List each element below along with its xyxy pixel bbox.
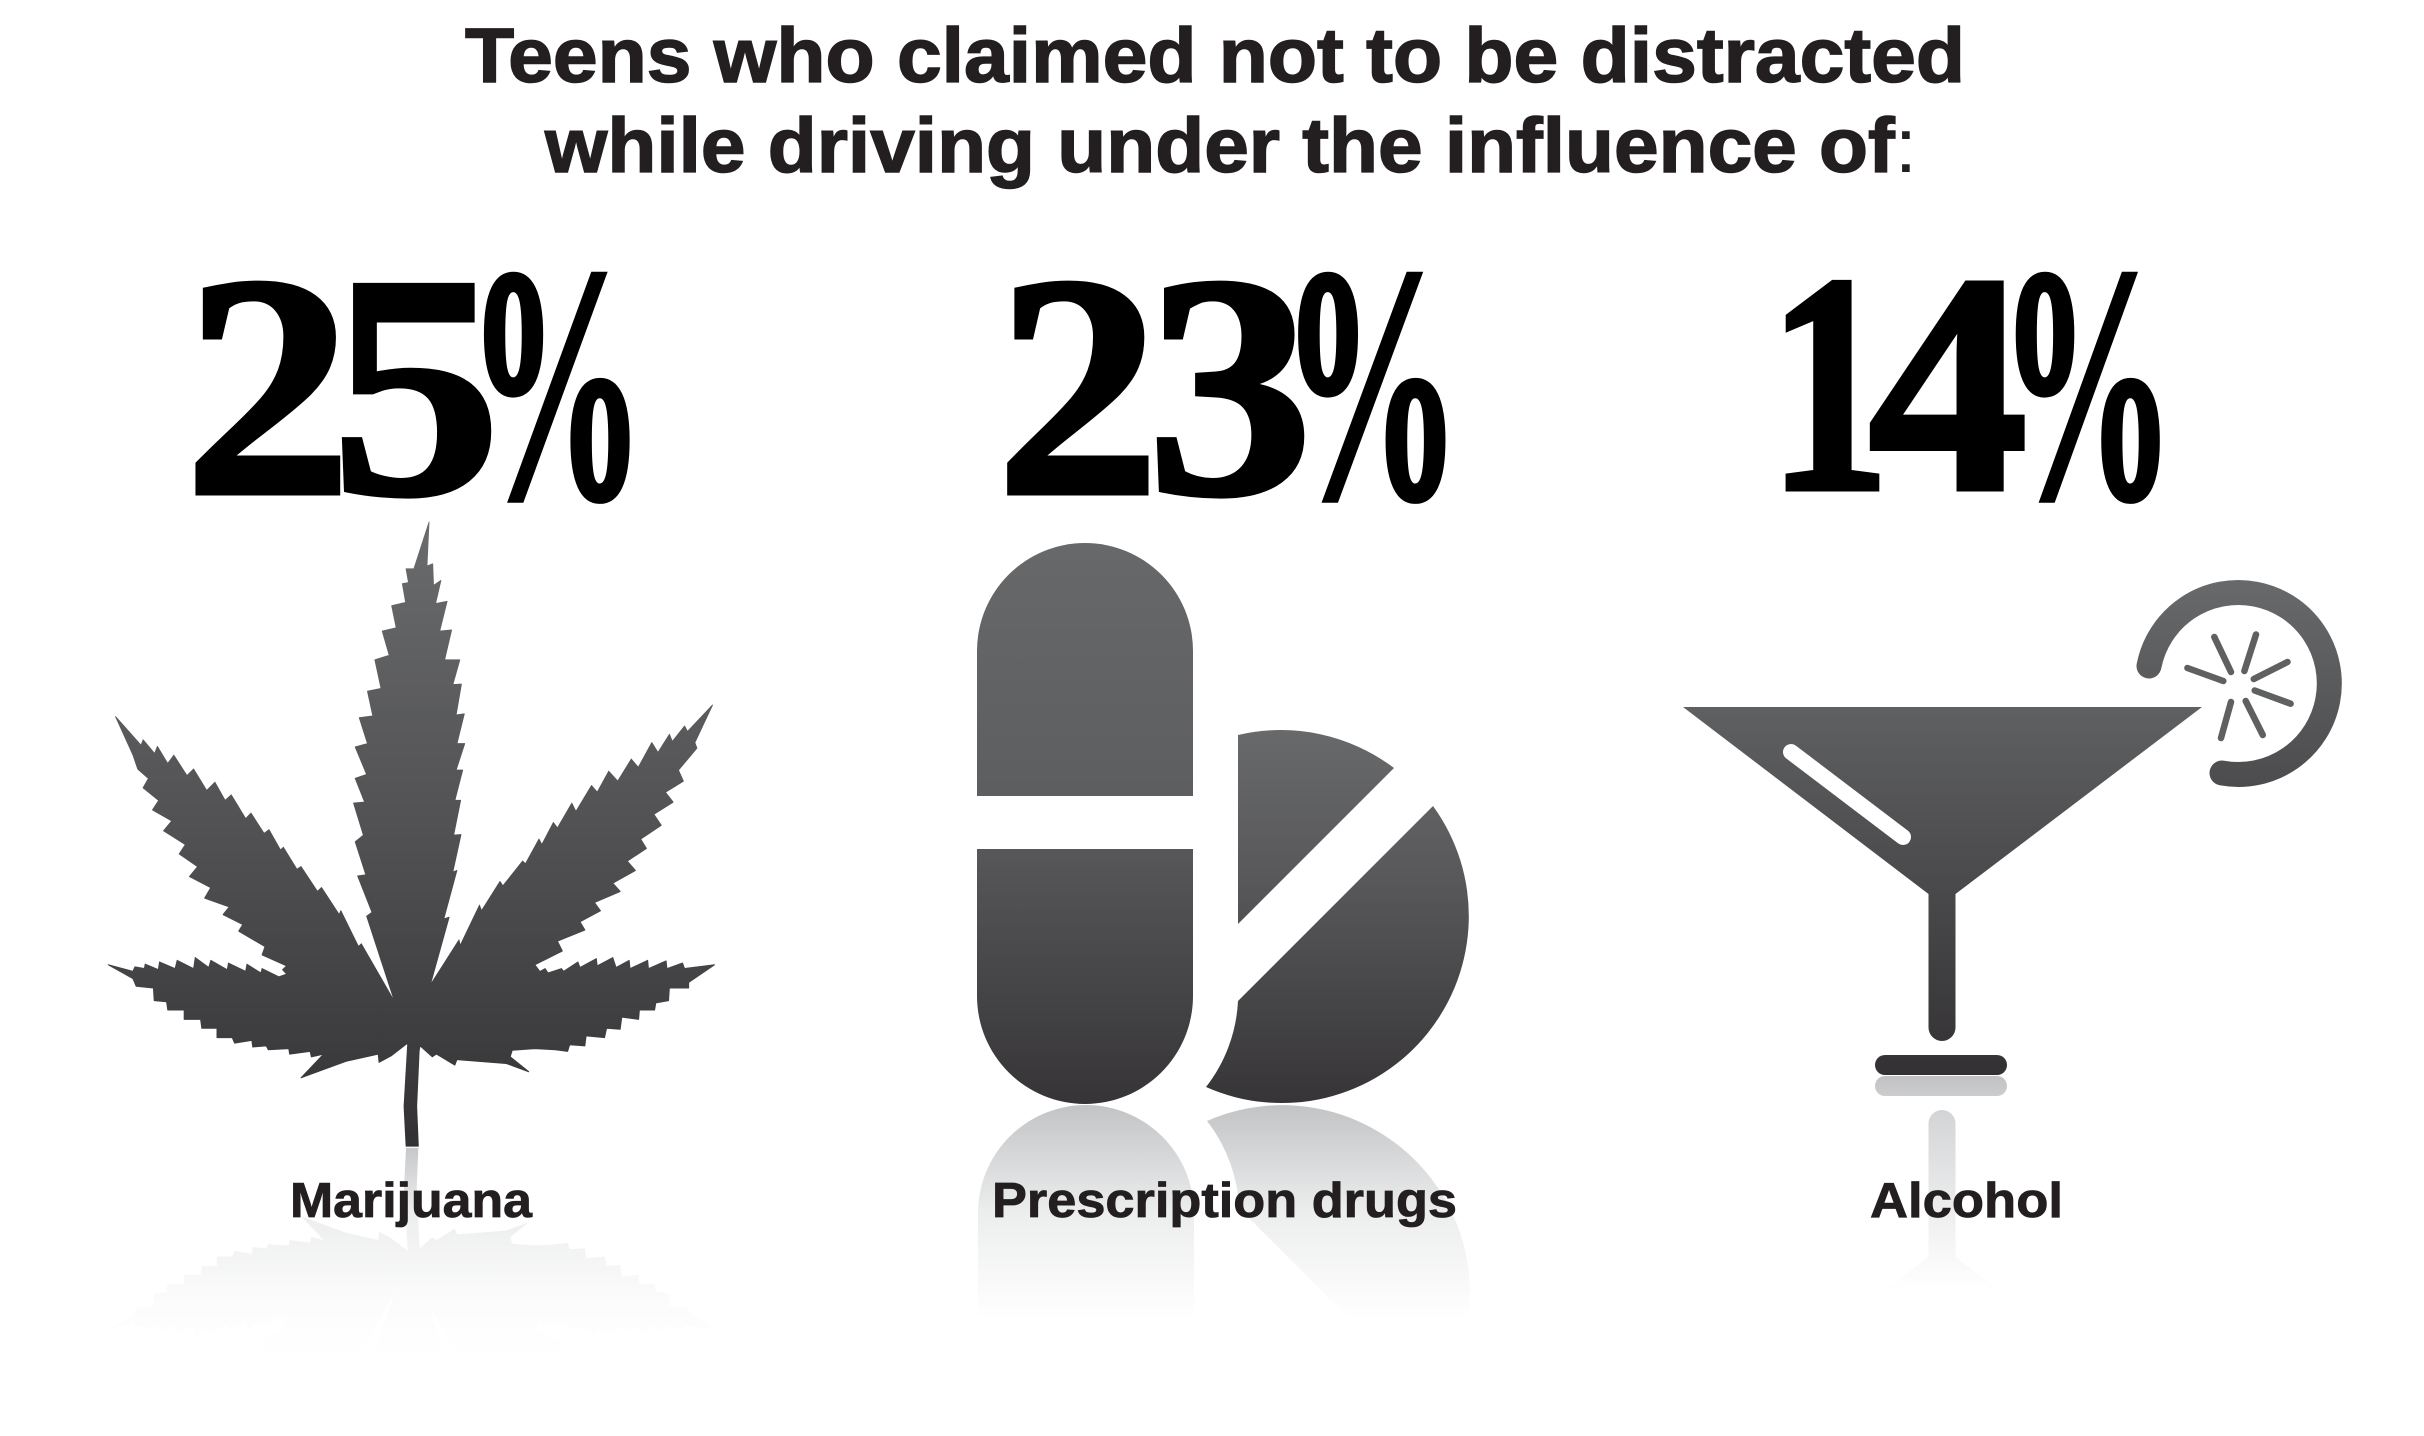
icon: cocktail glass xyxy=(1683,707,2202,1075)
icon: citrus slice xyxy=(2149,592,2329,774)
stat: 25% marijuana: 5 xyxy=(331,211,501,562)
stat: 14% alcohol: 1 xyxy=(1768,210,1890,557)
label: marijuana: Marijuana xyxy=(290,1174,533,1228)
stat: 23% prescription drugs: 2 xyxy=(996,211,1160,562)
reflection: cocktail glass xyxy=(1700,1076,2185,1431)
stat: 14% alcohol: 4 xyxy=(1868,210,2028,557)
reflection: marijuana leaf xyxy=(108,1148,715,1358)
stat: 25% marijuana: 2 xyxy=(184,211,352,562)
title: while driving under the influence of : xyxy=(544,103,1917,189)
label: prescription drugs: Prescription drugs xyxy=(992,1174,1457,1228)
icon: marijuana leaf xyxy=(108,522,715,1146)
title xyxy=(465,13,1965,189)
icon: capsule xyxy=(977,543,1193,1104)
stat: 14% alcohol: % xyxy=(1999,199,2175,570)
label: alcohol: Alcohol xyxy=(1870,1174,2063,1228)
reflection: pills xyxy=(978,1105,1470,1403)
title: Teens who claimed not to be distracted xyxy=(465,13,1965,99)
stat: 25% marijuana: % xyxy=(467,199,645,570)
icon: split tablet xyxy=(1206,730,1469,1103)
stat: 23% prescription drugs: 3 xyxy=(1147,211,1313,562)
stat: 23% prescription drugs: % xyxy=(1281,199,1461,570)
